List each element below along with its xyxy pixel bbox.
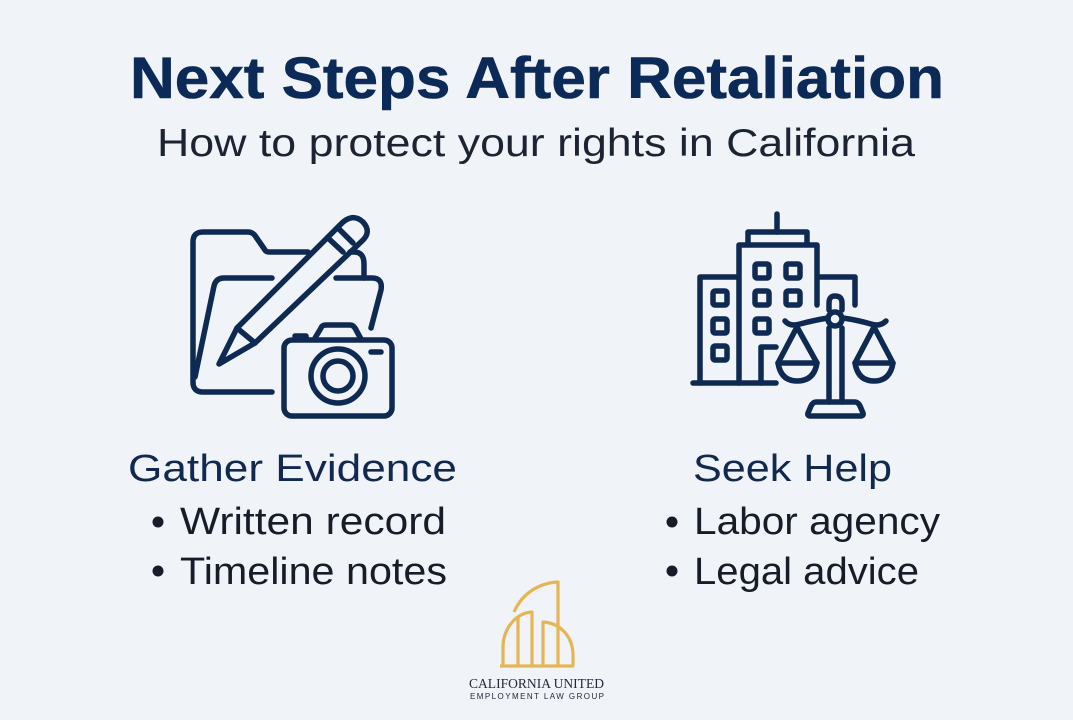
list: gather evidence items: Written record	[180, 501, 446, 543]
list: gather evidence items	[152, 501, 447, 593]
list: gather evidence items: Timeline notes	[180, 551, 447, 593]
list: seek help items	[666, 501, 940, 593]
subtitle: How to protect your rights in California	[157, 122, 915, 165]
logo mark: gold buildings	[500, 582, 574, 666]
heading: seek help: Seek Help	[693, 448, 892, 490]
list: seek help items: Labor agency	[694, 501, 940, 543]
list: seek help items: Legal advice	[694, 551, 919, 593]
logo tagline: EMPLOYMENT LAW GROUP	[470, 692, 604, 701]
title: Next Steps After Retaliation	[130, 46, 944, 111]
icon: folder, pencil and camera	[193, 218, 392, 416]
icon: office building and scales	[693, 214, 893, 416]
logo wordmark: CALIFORNIA UNITED	[469, 677, 604, 692]
logo: California United	[469, 582, 604, 701]
heading: gather evidence: Gather Evidence	[128, 448, 457, 490]
